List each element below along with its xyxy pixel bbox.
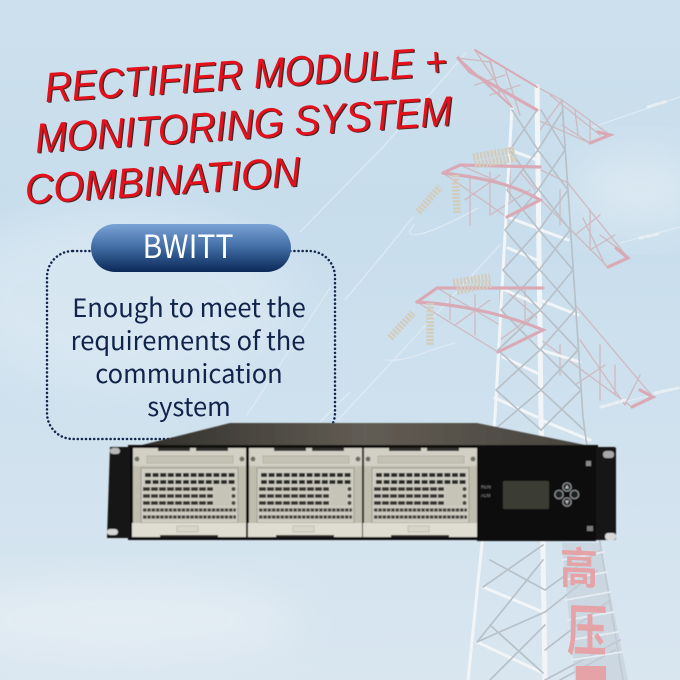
callout text	[71, 288, 306, 424]
status labels: RUN	[481, 484, 491, 490]
title	[17, 37, 458, 214]
callout text: requirements of the	[71, 321, 305, 358]
rectifier module 2	[248, 447, 363, 537]
tower arm bracing	[417, 50, 653, 407]
badge: BWITT	[91, 222, 291, 272]
monitoring panel	[477, 447, 596, 541]
title line 1: RECTIFIER MODULE +	[43, 37, 448, 111]
grey mast bracing	[477, 100, 623, 680]
status labels: ALM	[481, 493, 491, 498]
callout text: system	[147, 387, 231, 424]
white mast legs	[468, 87, 590, 680]
warning banner on tower	[560, 532, 628, 680]
background transmission tower	[247, 50, 680, 680]
callout text: Enough to meet the	[72, 288, 306, 325]
title line 2: MONITORING SYSTEM	[33, 87, 454, 162]
right rack ear	[596, 447, 616, 540]
badge: BWITT: BWITT	[142, 222, 234, 268]
title line 1: RECTIFIER MODULE +	[44, 38, 450, 112]
title line 3: COMBINATION	[25, 149, 304, 214]
title line 3: COMBINATION	[23, 148, 302, 213]
chassis front	[128, 445, 598, 540]
rectifier chassis	[107, 423, 616, 541]
rectifier module 3	[363, 447, 478, 537]
title line 2: MONITORING SYSTEM	[35, 88, 455, 163]
faint power lines	[247, 53, 680, 422]
warning banner on tower: 压	[567, 587, 607, 669]
rectifier module 1	[132, 447, 247, 537]
callout: dotted box	[47, 251, 335, 439]
LCD display	[503, 481, 549, 509]
insulators	[390, 150, 517, 345]
chassis top lid	[134, 423, 595, 447]
status labels	[481, 484, 491, 498]
pink tower arms	[417, 50, 653, 407]
wire insulators	[601, 101, 678, 407]
callout text: communication	[95, 354, 283, 391]
navigation keypad	[555, 483, 579, 506]
warning banner on tower: 高	[560, 532, 598, 597]
left rack ear	[107, 447, 130, 538]
